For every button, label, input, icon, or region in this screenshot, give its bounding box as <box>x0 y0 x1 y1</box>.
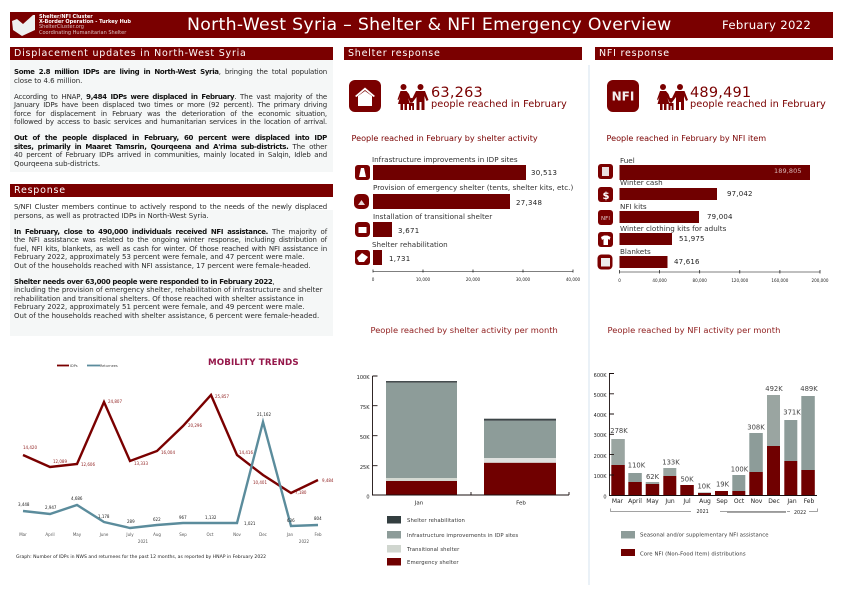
bar chart: NFI item February: NFI kits <box>620 202 647 211</box>
stacked bar chart: NFI activity per month: 19K <box>716 480 730 488</box>
text: displacement updates: According to HNAP, 9,484 IDPs were displaced in February. The vast majority of the <box>14 92 327 100</box>
text: response: Shelter needs over 63,000 people were responded to in February 2022, <box>14 278 275 286</box>
line chart: IDPs and returnees: 14,420 <box>23 445 37 450</box>
stacked bar chart: shelter activity per month: Jan <box>414 500 424 506</box>
line chart: IDPs and returnees: 2022 <box>299 539 310 544</box>
stacked bar chart: NFI activity per month: 110K <box>628 462 646 470</box>
legend: shelter activity: Infrastructure improvements in IDP sites <box>407 533 518 539</box>
line chart: IDPs and returnees: 21,162 <box>257 412 271 417</box>
stacked bar chart: NFI activity per month: Nov <box>751 498 763 505</box>
legend: shelter activity: Shelter rehabilitation <box>407 518 465 524</box>
logo mark <box>12 15 35 36</box>
stat: NFI people reached <box>690 85 826 110</box>
text: displacement updates: 40 percent of February IDPs arrived in communities, mainly located in Salqin, Idleb and <box>14 151 327 159</box>
icons: NFI items <box>598 164 613 270</box>
bar chart: shelter activity February: 20,000 <box>466 277 481 282</box>
text: displacement updates: sites, primarily in Maaret Tamsrin, Qourqeena and A'rima sub-districts. The other <box>14 142 327 150</box>
bar chart: shelter activity February: 10,000 <box>416 277 431 282</box>
legend: NFI activity: Seasonal and/or supplementary NFI assistance <box>640 532 769 538</box>
text: response: February 2022, approximately 51 percent were female, and 49 percent were male. <box>14 303 305 311</box>
icons: NFI items: $ <box>603 191 610 202</box>
stacked bar chart: NFI activity per month: 200K <box>594 454 607 460</box>
text: displacement updates: Out of the people displaced in February, 60 percent were displaced into IDP <box>14 134 327 142</box>
text: displacement updates: force for displacement in February was the deterioration of the economic situation, <box>14 110 327 118</box>
stacked bar chart: shelter activity per month: 25K <box>360 465 370 471</box>
heading: response <box>10 184 333 197</box>
line chart: IDPs and returnees: July <box>125 532 134 537</box>
line chart: IDPs and returnees: 3,448 <box>18 502 30 507</box>
heading: NFI monthly chart: People reached by NFI activity per month <box>608 325 780 335</box>
stacked bar chart: shelter activity per month: 0 <box>366 494 370 500</box>
stacked bar chart: NFI activity per month: 2021 <box>696 509 709 515</box>
stat: shelter people reached: 63,263 <box>431 85 483 101</box>
legend: shelter activity: Transitional shelter <box>406 547 460 553</box>
bar chart: NFI item February: 79,004 <box>707 213 733 221</box>
stacked bar chart: NFI activity per month: Feb <box>804 498 815 505</box>
line chart: IDPs and returnees: 2021 <box>138 539 149 544</box>
legend: mobility chart: Returnees <box>100 364 118 368</box>
legend: mobility chart: IDPs <box>70 364 78 368</box>
heading: NFI response <box>595 47 833 60</box>
stacked bar chart: NFI activity per month: Jun <box>664 498 675 505</box>
stacked bar chart: NFI activity per month: Aug <box>699 498 711 505</box>
bar chart: NFI item February: 47,616 <box>674 258 700 266</box>
line chart: IDPs and returnees: 289 <box>127 519 135 524</box>
stat: NFI people reached: people reached in February <box>690 99 826 110</box>
line chart: IDPs and returnees: 12,606 <box>81 462 95 467</box>
text: response: February 2022, approximately 53 percent were female, and 47 percent were male. <box>14 253 305 261</box>
response panel background <box>10 210 333 336</box>
line chart: IDPs and returnees: 967 <box>179 515 187 520</box>
stacked bar chart: NFI activity per month <box>594 373 818 516</box>
line chart: IDPs and returnees: 12,089 <box>53 459 67 464</box>
icon: family, shelter <box>398 84 428 110</box>
legend: shelter activity: Emergency shelter <box>407 560 459 566</box>
line chart: IDPs and returnees: 4,686 <box>71 496 83 501</box>
bar chart: shelter activity February: 40,000 <box>566 277 581 282</box>
bar chart: shelter activity February: 27,348 <box>516 199 542 207</box>
line chart: IDPs and returnees: Jan <box>286 532 294 537</box>
cluster name: Coordinating Humanitarian Shelter <box>39 30 126 36</box>
bar chart: NFI item February: Winter clothing kits for adults <box>620 224 727 233</box>
line chart: IDPs and returnees: 7,180 <box>295 490 307 495</box>
bar chart: shelter activity February: 30,513 <box>531 169 557 177</box>
icon: shelter house <box>349 80 381 112</box>
text: response: persons, as well as protracted IDPs in North-West Syria. <box>14 212 209 220</box>
text: response <box>14 203 328 320</box>
text: response: including the provision of emergency shelter, rehabilitation of infrastructure and shelter <box>14 286 323 294</box>
bar chart: NFI item February: 0 <box>618 278 621 283</box>
icons: NFI items: NFI <box>601 216 610 222</box>
stacked bar chart: NFI activity per month: 489K <box>800 385 818 393</box>
line chart: IDPs and returnees: 10,401 <box>253 480 267 485</box>
heading: shelter activity chart: People reached in February by shelter activity <box>352 133 538 143</box>
stacked bar chart: NFI activity per month: 492K <box>765 385 783 393</box>
stacked bar chart: NFI activity per month: 10K <box>697 482 711 490</box>
bar chart: shelter activity February <box>372 155 581 282</box>
bar chart: shelter activity February: Infrastructure improvements in IDP sites <box>372 155 518 164</box>
stat: shelter people reached <box>431 85 567 110</box>
icon: family, NFI <box>657 84 688 110</box>
stacked bar chart: NFI activity per month: 0 <box>603 494 606 500</box>
cluster name: ShelterCluster.org <box>39 24 84 30</box>
bar chart: NFI item February: 97,042 <box>727 190 753 198</box>
stacked bar chart: NFI activity per month: Sep <box>716 498 728 505</box>
title: North-West Syria – Shelter & NFI Emergency Overview <box>187 15 672 35</box>
line chart: IDPs and returnees: May <box>73 532 82 537</box>
stacked bar chart: NFI activity per month: Jan <box>786 498 797 505</box>
text: response: In February, close to 490,000 individuals received NFI assistance. The majority of <box>14 228 327 236</box>
heading: mobility trends: MOBILITY TRENDS <box>208 358 299 368</box>
line chart: IDPs and returnees: 1,021 <box>244 521 256 526</box>
bar chart: shelter activity February: 1,731 <box>389 255 411 263</box>
stacked bar chart: NFI activity per month: Mar <box>612 498 624 505</box>
line chart: IDPs and returnees: 20,296 <box>188 423 202 428</box>
heading: displacement updates <box>10 47 333 60</box>
line chart: IDPs and returnees <box>18 394 334 544</box>
stacked bar chart: NFI activity per month: 500K <box>594 393 607 399</box>
bar chart: shelter activity February: 0 <box>372 277 375 282</box>
stacked bar chart: NFI activity per month: 600K <box>594 373 607 379</box>
heading: NFI response: NFI response <box>599 48 670 59</box>
heading: response: Response <box>14 185 66 196</box>
text: response: the NFI assistance was related to the ongoing winter response, including distribution of <box>14 236 327 244</box>
line chart: IDPs and returnees: 636 <box>287 518 295 523</box>
text: displacement updates <box>14 68 328 168</box>
line chart: IDPs and returnees: April <box>45 532 55 537</box>
bar chart: NFI item February <box>618 156 829 283</box>
stacked bar chart: shelter activity per month: 100K <box>357 375 370 381</box>
cluster name: Shelter/NFI Cluster <box>39 14 93 20</box>
bar chart: shelter activity February: 3,671 <box>398 227 420 235</box>
legend: NFI activity <box>621 531 769 558</box>
text: displacement updates: close to 4.6 million. <box>14 76 82 84</box>
stacked bar chart: shelter activity per month <box>357 375 569 506</box>
text: displacement updates: followed by access to basic services and humanitarian services in the location of arrival. <box>14 118 327 126</box>
stacked bar chart: NFI activity per month: 2022 <box>794 510 806 516</box>
line chart: IDPs and returnees: 24,807 <box>108 399 122 404</box>
heading: displacement updates: Displacement updates in North-West Syria <box>14 48 247 59</box>
stacked bar chart: NFI activity per month: Jul <box>682 498 691 505</box>
column divider <box>588 65 590 585</box>
text: response: fuel, NFI kits, blankets, as well as cash for winter. Of those reached with NFI assistance in <box>14 244 327 252</box>
heading: shelter response: Shelter response <box>348 48 441 59</box>
line chart: IDPs and returnees: 16,004 <box>161 450 175 455</box>
line chart: IDPs and returnees: 14,416 <box>239 450 253 455</box>
line chart: IDPs and returnees: 622 <box>153 517 161 522</box>
stacked bar chart: NFI activity per month: May <box>646 498 659 505</box>
stacked bar chart: NFI activity per month: Dec <box>768 498 780 505</box>
icon: NFI <box>607 80 639 112</box>
stacked bar chart: NFI activity per month: 278K <box>610 427 628 435</box>
stacked bar chart: shelter activity per month: 50K <box>360 435 370 441</box>
stat: shelter people reached: people reached in February <box>431 99 567 110</box>
stat: NFI people reached: 489,491 <box>690 85 751 101</box>
bar chart: shelter activity February: Installation of transitional shelter <box>373 212 492 221</box>
bar chart: NFI item February: 120,000 <box>731 278 749 283</box>
stacked bar chart: shelter activity per month: 75K <box>360 405 370 411</box>
line chart: IDPs and returnees: 13,333 <box>134 461 148 466</box>
line chart: IDPs and returnees: 25,857 <box>215 394 229 399</box>
line chart: IDPs and returnees: 9,484 <box>322 478 334 483</box>
line chart: IDPs and returnees: Aug <box>153 532 161 537</box>
line chart: IDPs and returnees: Mar <box>19 532 27 537</box>
text: displacement updates: January IDPs have been displaced two times or more (92 percent). The primary driving <box>14 101 327 109</box>
stacked bar chart: NFI activity per month: 100K <box>594 474 607 480</box>
bar chart: NFI item February: Winter cash <box>620 178 663 187</box>
caption: mobility chart: Graph: Number of IDPs in NWS and returnees for the past 12 months, as reported by HNAP in February 2022 <box>16 554 266 560</box>
stacked bar chart: NFI activity per month: Oct <box>734 498 745 505</box>
line chart: IDPs and returnees: June <box>99 532 109 537</box>
line chart: IDPs and returnees: Feb <box>314 532 322 537</box>
header banner <box>10 12 833 38</box>
line chart: IDPs and returnees: Oct <box>207 532 214 537</box>
stacked bar chart: NFI activity per month: 371K <box>783 408 801 416</box>
heading: shelter monthly chart: People reached by shelter activity per month <box>370 325 558 335</box>
stacked bar chart: NFI activity per month: 400K <box>594 413 607 419</box>
line chart: IDPs and returnees: Sep <box>179 532 187 537</box>
stacked bar chart: shelter activity per month: Feb <box>516 500 526 506</box>
line chart: IDPs and returnees: 2,947 <box>45 505 57 510</box>
line chart: IDPs and returnees: 1,132 <box>205 515 217 520</box>
bar chart: NFI item February: 160,000 <box>771 278 789 283</box>
bar chart: NFI item February: Blankets <box>620 247 651 256</box>
stacked bar chart: NFI activity per month: 50K <box>680 476 694 484</box>
bar chart: NFI item February: 40,000 <box>652 278 667 283</box>
date: February 2022 <box>722 18 811 32</box>
bar chart: NFI item February: 51,975 <box>679 235 705 243</box>
bar chart: NFI item February: 200,000 <box>812 278 829 283</box>
bar chart: NFI item February: Fuel <box>620 156 635 165</box>
stacked bar chart: NFI activity per month: April <box>628 498 642 505</box>
bar chart: shelter activity February: 30,000 <box>516 277 531 282</box>
line chart: IDPs and returnees: Nov <box>233 532 242 537</box>
icons: shelter activities <box>354 165 370 265</box>
bar chart: shelter activity February: Provision of emergency shelter (tents, shelter kits, etc.) <box>373 183 573 192</box>
cluster name <box>39 14 131 36</box>
heading: NFI item chart: People reached in February by NFI item <box>606 133 766 143</box>
stacked bar chart: NFI activity per month: 62K <box>646 473 660 481</box>
icon: NFI: NFI <box>612 90 634 104</box>
cluster name: X-Border Operation - Turkey Hub <box>39 19 131 25</box>
line chart: IDPs and returnees: 804 <box>314 516 322 521</box>
stacked bar chart: NFI activity per month: 133K <box>662 458 680 466</box>
text: displacement updates: Qourqeena sub-districts. <box>14 160 100 168</box>
text: response: Out of the households reached with NFI assistance, 17 percent were female-headed. <box>14 262 311 270</box>
text: response: S/NFI Cluster members continue to actively respond to the needs of the newly displaced <box>14 203 327 211</box>
bar chart: NFI item February: 189,805 <box>774 167 802 175</box>
stacked bar chart: NFI activity per month: 100K <box>731 466 749 474</box>
stacked bar chart: NFI activity per month: 300K <box>594 433 607 439</box>
heading: shelter response <box>344 47 582 60</box>
bar chart: NFI item February: 80,000 <box>693 278 707 283</box>
text: response: rehabilitation and transitional shelters. Of those reached with shelter assistance in <box>14 294 304 302</box>
text: response: Out of the households reached with shelter assistance, 6 percent were female-headed. <box>14 312 319 320</box>
bar chart: shelter activity February: Shelter rehabilitation <box>372 240 448 249</box>
text: displacement updates: Some 2.8 million IDPs are living in North-West Syria, bringing the total population <box>14 68 327 76</box>
line chart: IDPs and returnees: Dec <box>259 532 267 537</box>
legend: shelter activity <box>387 516 518 566</box>
panel backgrounds <box>10 60 333 172</box>
line chart: IDPs and returnees: 1,178 <box>98 514 110 519</box>
legend: mobility chart <box>57 364 118 368</box>
stacked bar chart: NFI activity per month: 308K <box>747 424 765 432</box>
legend: NFI activity: Core NFI (Non-Food Item) distributions <box>640 552 746 558</box>
